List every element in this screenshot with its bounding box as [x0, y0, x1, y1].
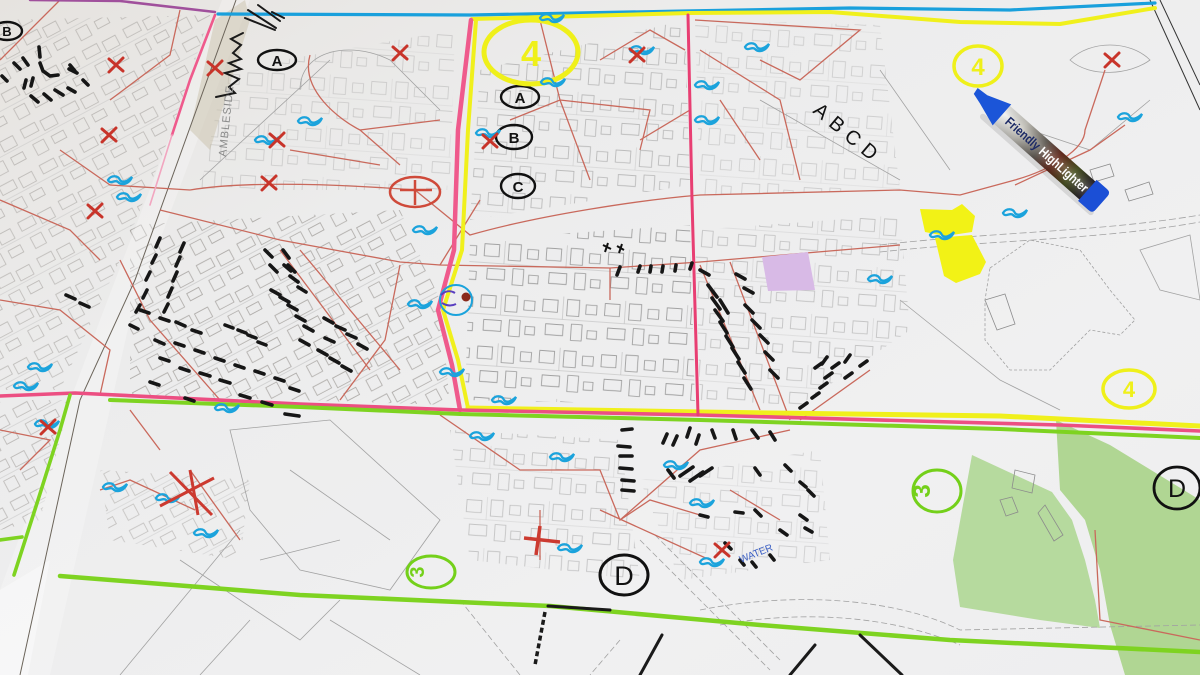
- marker yellow 4 top right: [954, 46, 1002, 86]
- marker C: C: [513, 179, 524, 196]
- handwritten label water: WATER: [738, 542, 775, 566]
- marker yellow 4 right: 4: [1123, 377, 1136, 402]
- green bottom boundary: [60, 576, 1200, 652]
- pink vertical boundary left: [438, 20, 471, 410]
- marker green 3 right: [909, 470, 961, 512]
- pink horizontal boundary: [0, 393, 1200, 431]
- marker B: [496, 125, 532, 149]
- pen cap end: [1078, 180, 1111, 213]
- marker A centre: [501, 86, 539, 108]
- pen label: Friendly HighLighter: [1002, 114, 1092, 195]
- purple boundary top left: [30, 0, 215, 12]
- marker yellow 4 right: [1103, 370, 1155, 408]
- marker partial top left: B: [2, 24, 12, 39]
- blue circled point with red dot: [440, 285, 472, 315]
- handwritten ABCD: ABCD: [809, 99, 887, 170]
- lavender plot: [762, 252, 815, 291]
- marker B: B: [509, 130, 520, 147]
- red cross markers: [41, 46, 1119, 557]
- green shaded land areas: [953, 420, 1200, 675]
- black hand lines at top: [216, 5, 284, 97]
- marker D bottom centre: [600, 555, 648, 595]
- yellow vertical boundary: [443, 20, 476, 408]
- marker yellow 4 large: [484, 20, 578, 84]
- black boundary bottom: [548, 606, 902, 675]
- marker A left: [258, 50, 296, 70]
- marker green 3 left: 3: [407, 566, 429, 578]
- marker A centre: A: [515, 90, 526, 107]
- green left boundary: [0, 395, 70, 575]
- large cross south west: [160, 470, 214, 515]
- marker C: [501, 174, 535, 198]
- map label Ambleside: AMBLESIDE: [217, 84, 237, 157]
- marker D right: D: [1168, 475, 1186, 503]
- black tally marks: [2, 47, 867, 567]
- pink vertical boundary centre: [688, 15, 698, 415]
- blue squiggle markers: [14, 14, 1142, 566]
- large cross south centre: [524, 526, 560, 555]
- yellow highlighted blocks: [920, 204, 986, 283]
- yellow horizontal boundary: [468, 408, 1200, 426]
- pen body: [993, 105, 1097, 201]
- highlighter pen: [964, 81, 1112, 216]
- marker green 3 left: [407, 556, 455, 588]
- marker green 3 right: 3: [909, 484, 936, 498]
- red circled cross: [390, 177, 440, 207]
- blue boundary top: [218, 3, 1155, 15]
- marker yellow 4 large: 4: [521, 33, 541, 74]
- faint pink continuation: [150, 135, 172, 205]
- plastic overlay fold: [0, 0, 250, 675]
- marker D bottom centre: D: [614, 561, 634, 591]
- black dashed boundary bottom: [535, 612, 545, 665]
- marker partial top left: [0, 22, 22, 40]
- pink boundary upper left: [172, 15, 215, 135]
- black crosses on road: [603, 243, 624, 253]
- marker A left: A: [272, 53, 283, 70]
- yellow boundary top: [472, 8, 1155, 24]
- green horizontal boundary: [110, 400, 1200, 438]
- marker yellow 4 top right: 4: [971, 54, 985, 81]
- pen tip: [966, 81, 1011, 125]
- marker D right: [1154, 467, 1200, 509]
